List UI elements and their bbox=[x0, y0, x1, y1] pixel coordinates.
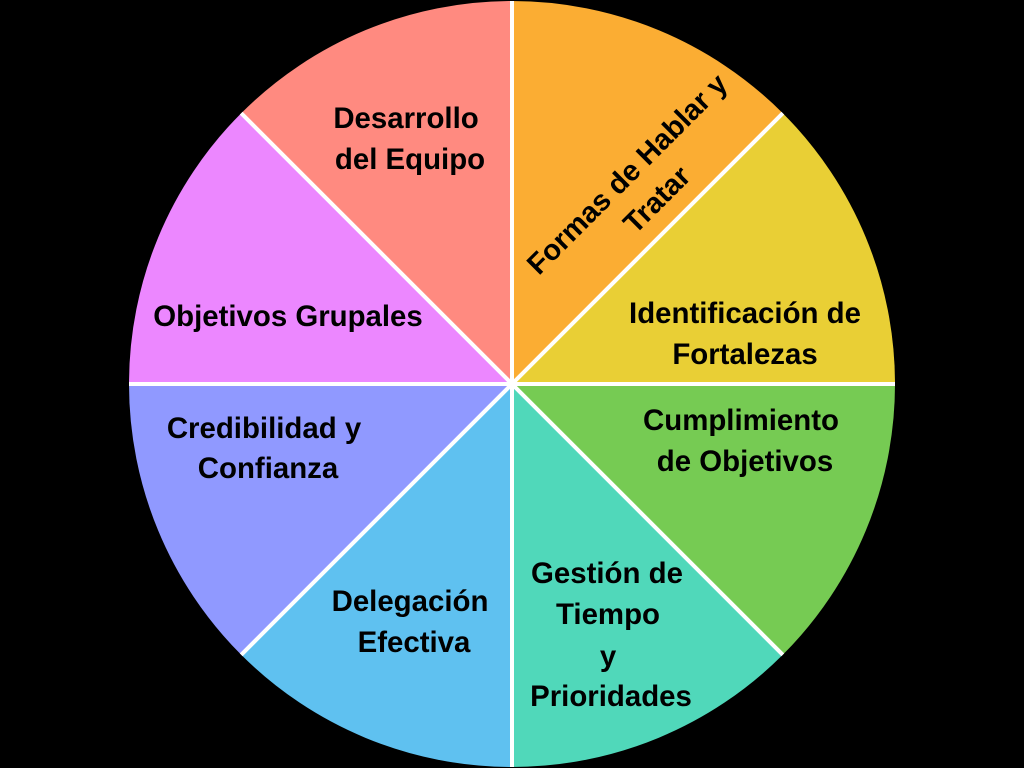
segment: Formas de Hablar y Tratar: Tratar bbox=[618, 160, 697, 240]
segment: Identificación de Fortalezas: Identificación de bbox=[629, 297, 861, 330]
segment: Gestión de Tiempo y Prioridades: y bbox=[600, 640, 617, 673]
segment: Credibilidad y Confianza: Confianza bbox=[198, 452, 339, 485]
segment: Gestión de Tiempo y Prioridades: Gestión de bbox=[531, 557, 683, 590]
segment: Delegación Efectiva bbox=[241, 384, 512, 767]
segment: Objetivos Grupales: Objetivos Grupales bbox=[153, 300, 423, 333]
segment: Desarrollo del Equipo: Desarrollo bbox=[333, 102, 479, 135]
segment: Credibilidad y Confianza bbox=[129, 384, 512, 655]
segment: Credibilidad y Confianza: Credibilidad y bbox=[167, 412, 362, 445]
segment: Gestión de Tiempo y Prioridades: Tiempo bbox=[556, 598, 660, 631]
segment: Formas de Hablar y Tratar: Formas de Hablar y bbox=[521, 68, 734, 281]
segment: Cumplimiento de Objetivos: de Objetivos bbox=[657, 445, 833, 478]
segment: Identificación de Fortalezas bbox=[512, 113, 895, 384]
segment: Objetivos Grupales bbox=[129, 113, 512, 384]
segment: Cumplimiento de Objetivos bbox=[512, 384, 895, 655]
segment: Gestión de Tiempo y Prioridades bbox=[512, 384, 783, 767]
divider spokes bbox=[129, 1, 895, 767]
segment: Delegación Efectiva: Delegación bbox=[332, 585, 488, 618]
segment: Desarrollo del Equipo bbox=[241, 1, 512, 384]
segment: Desarrollo del Equipo: del Equipo bbox=[335, 143, 485, 176]
segment: Identificación de Fortalezas: Fortalezas bbox=[672, 338, 818, 371]
segment: Formas de Hablar y Tratar bbox=[512, 1, 783, 384]
segment: Gestión de Tiempo y Prioridades: Prioridades bbox=[530, 680, 692, 713]
segment: Delegación Efectiva: Efectiva bbox=[358, 626, 471, 659]
segment: Cumplimiento de Objetivos: Cumplimiento bbox=[643, 404, 839, 437]
